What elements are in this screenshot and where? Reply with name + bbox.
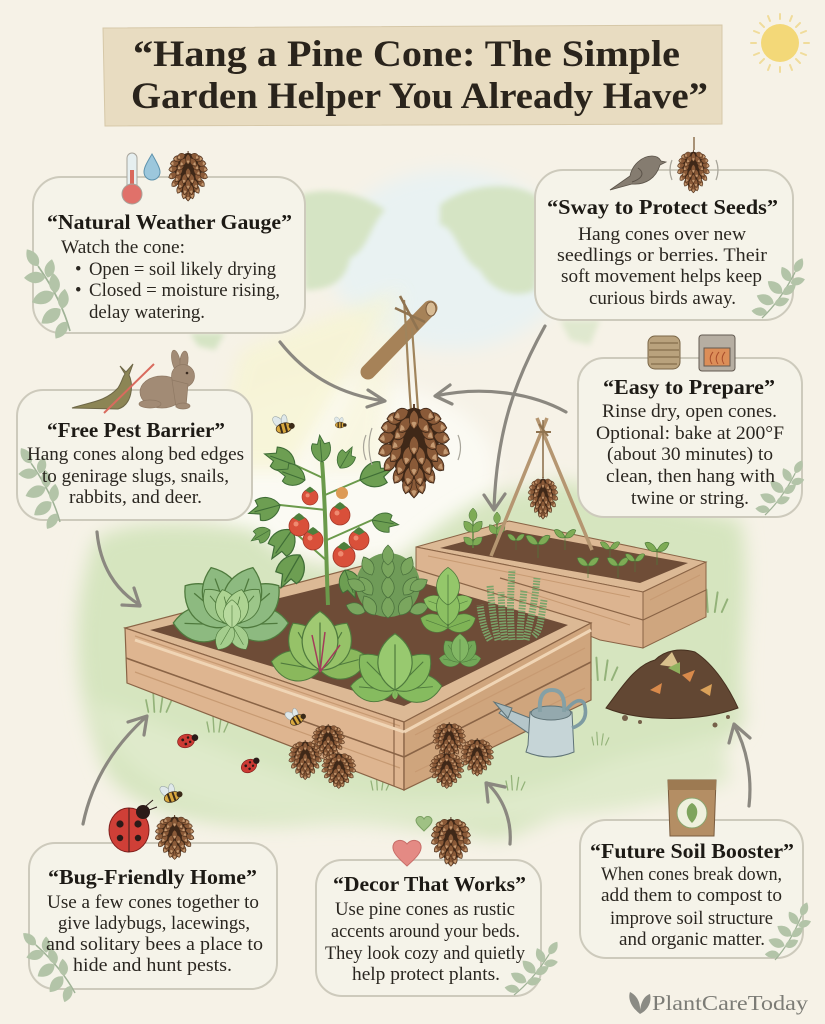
heading: “Future Soil Booster”	[590, 839, 794, 863]
watering can	[494, 690, 586, 757]
body text: rabbits, and deer.	[69, 487, 202, 508]
panel: free pest barrier	[0, 349, 252, 533]
panel: easy to prepare	[578, 335, 809, 521]
body text: •	[75, 280, 82, 301]
panel: sway to protect seeds	[535, 137, 810, 324]
chard	[269, 611, 372, 685]
sprig	[764, 898, 814, 963]
panel: bug-friendly home	[3, 779, 277, 1005]
heading: “Bug-Friendly Home”	[48, 865, 257, 889]
spinach	[349, 634, 443, 704]
panel: natural weather gauge	[0, 151, 305, 343]
icon: pine cone	[430, 817, 472, 867]
icon: bee	[157, 779, 184, 805]
arrows	[83, 326, 750, 844]
body text: •	[75, 259, 82, 280]
body text: give ladybugs, lacewings,	[58, 913, 250, 934]
ladybugs and garden bees	[176, 411, 347, 776]
icon: hearts	[393, 816, 432, 866]
body text: Optional: bake at 200°F	[596, 423, 784, 444]
body text: twine or string.	[631, 488, 749, 509]
body text: improve soil structure	[610, 908, 773, 929]
tree foliage washes	[190, 186, 600, 350]
basil	[418, 567, 478, 636]
herb cluster	[344, 545, 431, 618]
logo: PlantCareToday	[652, 991, 809, 1015]
title banner: “Hang a Pine Cone: The Simple	[133, 34, 680, 75]
icon: pine cone	[154, 815, 195, 860]
rosemary	[480, 570, 544, 640]
body text: seedlings or berries. Their	[557, 245, 768, 266]
compost pile	[606, 650, 738, 728]
body text	[557, 224, 768, 309]
body text: They look cozy and quietly	[325, 943, 526, 964]
body text: (about 30 minutes) to	[607, 444, 773, 465]
back raised bed with seedlings	[416, 508, 706, 648]
body text: Hang cones along bed edges	[27, 444, 244, 465]
sky and light wash	[195, 170, 570, 560]
icon: bird	[610, 156, 666, 190]
body text: Open = soil likely drying	[89, 259, 276, 280]
icon: soil bag	[668, 780, 716, 836]
title banner: Garden Helper You Already Have”	[131, 76, 708, 117]
body text	[601, 864, 782, 950]
body text: hide and hunt pests.	[73, 955, 232, 976]
body text: and organic matter.	[619, 929, 765, 950]
sprig	[0, 241, 99, 343]
tomato plant	[246, 434, 400, 605]
body text: When cones break down,	[601, 864, 782, 885]
sprig	[3, 925, 92, 1005]
icon: slug	[72, 364, 154, 413]
sprig	[0, 440, 87, 533]
icon: twine spool	[648, 336, 680, 369]
pine cones at bed corner right	[429, 722, 494, 789]
body text	[27, 444, 244, 508]
body text: to genirage slugs, snails,	[42, 466, 229, 487]
icon: water drop	[144, 154, 160, 180]
icon: pine cone	[168, 151, 208, 201]
small basil	[438, 634, 482, 668]
sprig	[750, 250, 810, 324]
body text: help protect plants.	[352, 964, 500, 985]
body text: Use a few cones together to	[47, 892, 259, 913]
body text	[61, 237, 280, 323]
body text: and solitary bees a place to	[46, 934, 263, 955]
icon: swaying pine cone	[670, 137, 718, 193]
body text: Watch the cone:	[61, 237, 185, 258]
body text	[325, 899, 526, 985]
body text: Hang cones over new	[578, 224, 747, 245]
body text	[596, 401, 784, 509]
body text: clean, then hang with	[606, 466, 776, 487]
title banner	[103, 25, 722, 126]
green wash behind the beds	[77, 480, 746, 840]
heading: “Natural Weather Gauge”	[47, 210, 292, 234]
sprig	[503, 930, 565, 1004]
body text: Closed = moisture rising,	[89, 280, 280, 301]
icon: oven	[699, 335, 735, 371]
heading: “Sway to Protect Seeds”	[547, 195, 778, 219]
body text: accents around your beds.	[331, 921, 520, 942]
body text: add them to compost to	[601, 885, 782, 906]
heading: “Decor That Works”	[333, 872, 526, 896]
heading: “Easy to Prepare”	[603, 375, 775, 399]
panel: decor that works	[316, 816, 565, 1004]
panel: future soil booster	[580, 780, 814, 963]
heading: “Free Pest Barrier”	[47, 418, 225, 442]
body text: delay watering.	[89, 302, 205, 323]
grass tufts	[146, 590, 727, 790]
body text: Rinse dry, open cones.	[602, 401, 777, 422]
body text	[46, 892, 263, 976]
body text: soft movement helps keep	[561, 266, 762, 287]
body text: Use pine cones as rustic	[335, 899, 515, 920]
tripod with hanging pine cone	[491, 418, 592, 556]
lettuce	[173, 561, 291, 654]
sun	[751, 14, 809, 72]
icon: rabbit	[139, 349, 194, 409]
icon: ladybug	[109, 800, 157, 852]
body text: curious birds away.	[589, 288, 736, 309]
hanging branch and pine cone	[364, 296, 460, 498]
sprig	[754, 453, 809, 521]
icon: thermometer	[122, 153, 142, 204]
main raised bed	[125, 560, 591, 790]
pine cones at bed corner left	[288, 724, 357, 789]
